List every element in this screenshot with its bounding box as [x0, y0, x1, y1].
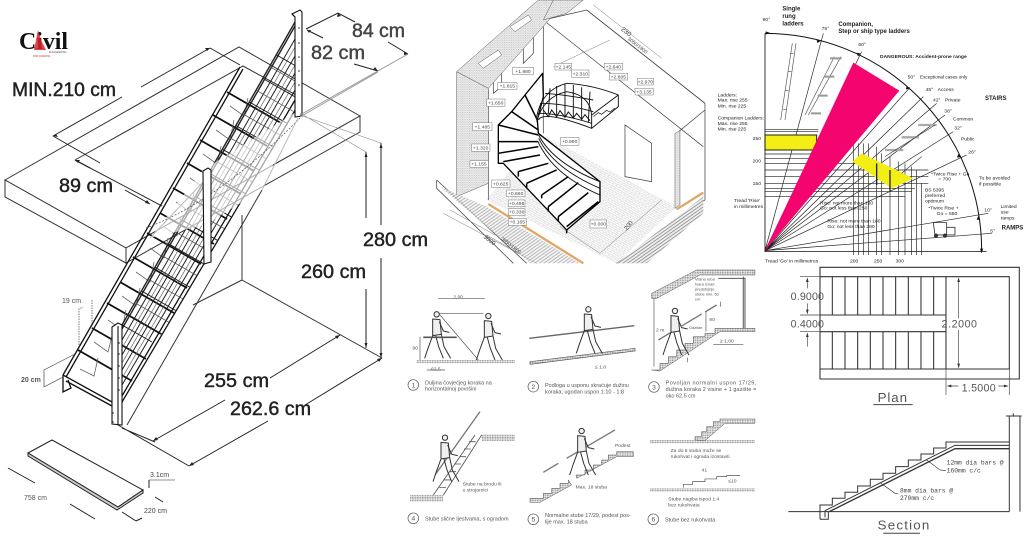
logo: Civil: DISCOVERING — [33, 55, 51, 58]
panel: six stair types diagrams — [408, 270, 757, 526]
captions: lije max. 18 stuba — [545, 520, 589, 526]
chart labels: DANGEROUS: Accident-prone range — [880, 54, 967, 60]
diagram 1: human stride — [412, 294, 515, 372]
captions: Normalne stube 17/29, podest pos- — [545, 513, 631, 519]
level label text: +1.485 — [475, 124, 490, 130]
level label text: +2.310 — [573, 71, 588, 77]
tread detail: 220 cm — [144, 508, 167, 515]
diagram 3: normal stair with headroom — [652, 270, 755, 371]
chart labels: Tread 'Go' in millimetres — [765, 259, 819, 265]
room walls and floor lines — [127, 190, 382, 425]
chart labels: ladders — [782, 21, 804, 27]
chart labels: preferred — [925, 193, 945, 199]
panel: isometric straight stair with dimensions — [5, 10, 428, 521]
chart labels: Go: not less than 250 — [820, 206, 868, 212]
captions: Stube bez rukohvata — [665, 517, 716, 523]
marker numbers: 4 — [411, 516, 415, 523]
diagram 3: normal stair with headroom: predstojnje — [695, 287, 715, 292]
logo: Civil: ENGINEERING — [49, 51, 67, 54]
chart labels: ramps — [1001, 215, 1015, 221]
numbered markers — [408, 380, 659, 525]
plan title: Plan — [878, 390, 907, 405]
level label text: +0.330 — [509, 210, 525, 216]
level label text: +1.320 — [473, 145, 489, 151]
chart labels: Rise: not more than 180 — [827, 219, 881, 225]
captions: oko 62,5 cm — [666, 393, 696, 399]
chart labels: optimum — [925, 198, 944, 204]
diagram 3: normal stair with headroom: tvara iznad — [695, 282, 714, 287]
diagram 6: stairs without handrail: Za do 5 stuba može se — [671, 448, 722, 454]
dimension labels: 260 cm — [301, 262, 366, 283]
chart labels: 5° — [990, 229, 995, 235]
level label text: 3850/1900 — [499, 236, 522, 256]
yellow optimum zone — [852, 153, 913, 188]
chart labels: 150 — [753, 181, 761, 187]
chart labels: Max. rise 255 — [718, 98, 748, 104]
level label text: +0.495 — [509, 201, 525, 207]
captions: horizontalnoj površini — [425, 387, 477, 393]
diagram 3: normal stair with headroom: 90 — [709, 317, 715, 323]
chart labels: Private — [945, 97, 961, 103]
chart labels: Common — [953, 116, 973, 122]
level label text: +0.165 — [510, 220, 525, 226]
level label text: +0.000 — [591, 222, 606, 228]
dimension labels: MIN.210 cm — [12, 80, 116, 101]
diagram 6: stairs without handrail: ≤10 — [728, 479, 737, 485]
level label text — [471, 26, 653, 256]
chart labels: 200 — [850, 259, 859, 265]
forklift — [933, 223, 955, 237]
chart labels: Exceptional cases only — [920, 75, 968, 80]
small dimension: riser: 19 cm — [62, 298, 81, 305]
chart labels: BS 5395 — [925, 187, 944, 193]
level labels — [470, 63, 653, 228]
captions: koraka, ugodan uspon 1:10 - 1:8 — [545, 389, 624, 395]
angle rays — [765, 33, 992, 251]
chart labels: 38° — [944, 109, 952, 115]
chart labels: 200 — [753, 158, 761, 164]
faded section where stair passes the slab — [150, 112, 296, 238]
diagram 4: ship ladder — [410, 412, 515, 502]
chart labels — [718, 7, 1023, 265]
level label text: +2.805 — [611, 74, 626, 80]
captions — [425, 380, 757, 526]
floor hatching — [487, 133, 677, 263]
marker numbers: 2 — [531, 384, 535, 391]
dimension labels: 255 cm — [204, 371, 269, 392]
post bolts — [112, 27, 300, 423]
tread detail — [8, 440, 175, 521]
dimension labels — [12, 21, 428, 420]
plan dimension lines — [800, 277, 1009, 395]
chart labels: Companion, — [838, 22, 873, 28]
diagram 4: ship ladder: u strojarnici — [463, 488, 488, 494]
dimension labels: 84 cm — [352, 21, 405, 42]
chart labels: 75° — [822, 26, 829, 32]
level label text: 200 — [624, 220, 635, 232]
chart labels: 42° — [933, 97, 941, 103]
level label text: +3.135 — [636, 89, 652, 95]
diagram 3: normal stair with headroom: stube min. 50 — [695, 292, 720, 297]
orange foundation strips — [488, 193, 703, 263]
stair risers — [80, 98, 248, 376]
chart labels: Public — [961, 137, 975, 143]
level label text: 230 — [619, 26, 633, 39]
diagram 3: normal stair with headroom: 2 m — [656, 328, 664, 334]
chart labels: Single — [782, 7, 801, 13]
chart labels: Limited — [1001, 204, 1017, 210]
level label text: +1.815 — [500, 84, 515, 90]
logo: Civil: Civil — [19, 29, 68, 55]
diagram 5: stair with landing: Podest — [615, 443, 631, 449]
chart labels: To be avoided — [979, 176, 1010, 182]
section notes: 270mm c/c — [900, 495, 934, 502]
captions: dužina koraka 2 visine + 1 gazište = — [666, 387, 756, 393]
chart labels: 250 — [753, 136, 761, 142]
panel: plan and section drawing — [788, 267, 1022, 533]
level label text: 3000 — [482, 234, 497, 248]
captions: Povoljan normalni uspon 17/29, — [666, 381, 757, 387]
marker numbers: 5 — [531, 517, 535, 524]
dimension arrowheads — [53, 13, 408, 466]
chart labels: 60° — [858, 42, 866, 48]
stair treads — [78, 92, 281, 381]
ladders — [781, 43, 842, 120]
diagram 3: normal stair with headroom: cm — [695, 297, 701, 302]
level label text: +2.970 — [638, 79, 653, 85]
chart labels: = 700 — [938, 177, 951, 183]
section notes: 8mm dia bars @ — [900, 487, 953, 494]
chart labels: Rise: not more than 190 — [820, 200, 873, 206]
dimension labels: 89 cm — [59, 176, 113, 197]
dimension labels: 82 cm — [311, 43, 365, 64]
slab: upper floor — [5, 47, 360, 263]
chart labels: Min. rise 225 — [718, 126, 746, 132]
tread detail: 758 cm — [24, 495, 47, 502]
diagram 1: human stride: 90 — [412, 346, 418, 352]
chart labels: RAMPS — [1002, 226, 1023, 232]
arc and axes — [765, 33, 987, 252]
captions: Duljina čovječjeg koraka na — [425, 380, 493, 386]
marker numbers: 1 — [411, 382, 415, 389]
pink danger zone — [765, 63, 899, 251]
section title: Section — [878, 517, 929, 532]
stone walls — [457, 0, 680, 208]
level label text: +1.650 — [488, 100, 504, 106]
level label text: +0.825 — [493, 181, 509, 187]
building shell — [437, 5, 705, 263]
level label text: +1.155 — [471, 162, 487, 168]
captions: Podloga u usponu skraćuje dužinu — [545, 383, 629, 389]
diagram 3: normal stair with headroom: Visina ruba — [695, 277, 716, 282]
chart labels: 50° — [908, 75, 915, 81]
captions: Stube slične ljestvama, s ogradom — [425, 516, 509, 522]
panel: isometric curved stair — [437, 0, 705, 263]
diagram 2: ramp: ≤ 1:8 — [595, 364, 606, 370]
plan dimension labels: 0.4000 — [791, 318, 824, 330]
dimension labels: 280 cm — [363, 230, 428, 251]
chart labels: 26° — [968, 149, 976, 155]
chart labels: if possible — [979, 181, 1001, 187]
diagram 5: stair with landing: Max. 18 stuba — [576, 484, 607, 490]
chart labels: rung — [782, 14, 796, 20]
plan dimension labels — [791, 291, 996, 394]
small dimension: riser — [21, 298, 92, 387]
plan dimension labels: 0.9000 — [791, 291, 824, 303]
tread detail: 3.1cm — [150, 472, 169, 479]
posts — [112, 10, 302, 425]
marker numbers: 6 — [651, 517, 655, 524]
diagram 3: normal stair with headroom: ≥ 1,00 — [720, 338, 734, 344]
small dimension: riser: 20 cm — [21, 377, 41, 384]
plan dimension labels: 1.5000 — [962, 382, 996, 394]
chart labels: STAIRS — [985, 96, 1006, 102]
chart labels: Max. rise 255 — [718, 121, 748, 127]
yellow band — [765, 135, 817, 150]
section notes — [900, 460, 1004, 502]
chart labels: Go: not less than 280 — [827, 224, 875, 230]
handrail grid — [122, 22, 295, 385]
chart labels: *Twice Rise + Go — [931, 171, 970, 177]
section drawing — [788, 413, 1022, 519]
chart labels: Tread 'Rise' — [734, 198, 760, 204]
rise grid lines — [765, 129, 928, 255]
chart labels: Go = 550 — [937, 211, 958, 217]
chart labels: Companion Ladders: — [718, 116, 764, 122]
diagram 1: human stride: 62,5 — [431, 366, 441, 372]
diagram 6: stairs without handrail: 41 — [702, 468, 707, 474]
plan outline — [820, 267, 1019, 379]
chart labels: Min. rise 225 — [718, 104, 746, 110]
panel: stair angle chart — [718, 7, 1023, 265]
dimension lines — [53, 13, 408, 466]
stair treads — [498, 95, 598, 233]
level label text: +0.990 — [562, 139, 578, 145]
chart labels: Ladders: — [718, 92, 737, 98]
chart labels: Access — [938, 87, 954, 93]
diagram 2: ramp — [529, 307, 635, 370]
level label text: +0.660 — [508, 191, 524, 197]
marker numbers: 3 — [652, 384, 656, 391]
level label text: +1.980 — [515, 69, 531, 75]
arrowheads — [766, 31, 983, 253]
plan dimension labels: 2.2000 — [942, 318, 977, 330]
chart labels: 32° — [954, 126, 962, 132]
chart labels: use — [1001, 209, 1009, 215]
chart labels: in millimetres — [734, 204, 764, 210]
chart labels: Step or ship type ladders — [838, 29, 910, 35]
dimension labels: 262.6 cm — [230, 399, 311, 420]
diagram 6: stairs without handrail — [650, 419, 755, 508]
level label text: +2.145 — [556, 64, 571, 70]
marker numbers — [411, 382, 656, 524]
chart labels: 250 — [874, 259, 883, 265]
chart labels: 10° — [984, 207, 992, 213]
chart labels: *Twice Rise + — [928, 206, 959, 212]
curved handrail — [537, 83, 618, 195]
level label text: +2.640 — [606, 64, 621, 70]
chart labels: 90° — [763, 17, 770, 23]
section notes: 12mm dia bars @ — [947, 460, 1004, 467]
diagram 6: stairs without handrail: Stube nagiba ispod 1:4 — [668, 496, 720, 502]
diagram 3: normal stair with headroom: Gazište — [689, 325, 703, 330]
diagram 6: stairs without handrail: rukohvat i ograda izostaviti — [671, 454, 730, 460]
diagram 1: human stride: 2,00 — [453, 294, 463, 300]
chart labels: 45° — [926, 87, 933, 93]
stair stringers — [63, 67, 297, 406]
curved stair flight — [498, 73, 600, 230]
diagram 5: stair with landing — [530, 428, 633, 502]
section notes: 160mm c/c — [947, 467, 981, 474]
chart labels: 300 — [896, 259, 904, 265]
diagram 6: stairs without handrail: bez rukohvata — [668, 502, 700, 508]
diagram 4: ship ladder: Stube na brodu ili — [463, 481, 501, 487]
stair sections — [885, 125, 937, 173]
level label text: 3050/1900 — [626, 36, 649, 56]
